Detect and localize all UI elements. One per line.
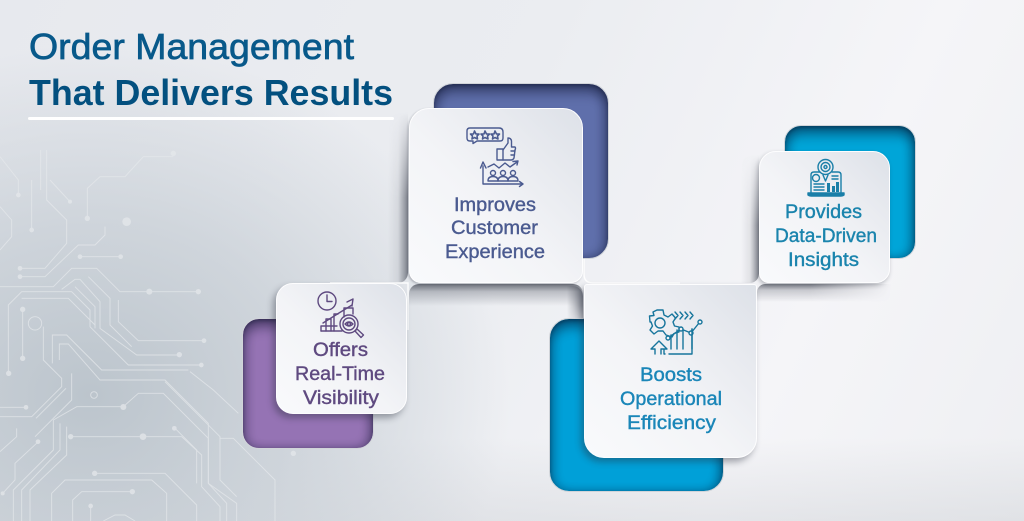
icon: laptop with insight bulb: [775, 158, 877, 271]
label: improves customer experience: Customer: [451, 217, 539, 239]
white card: [276, 283, 407, 414]
panel: provides data-driven insights: [756, 125, 916, 288]
label: offers real-time visibility: [295, 339, 385, 409]
label: provides data-driven insights: Provides: [785, 201, 862, 223]
white card: [409, 108, 583, 283]
label: provides data-driven insights: [775, 201, 877, 271]
icon: clock, growth chart and magnifier: [295, 291, 385, 409]
label: offers real-time visibility: Real-Time: [295, 363, 385, 385]
label: provides data-driven insights: Data-Driven: [775, 225, 877, 247]
blue back square: [549, 318, 724, 492]
label: boosts operational efficiency: Efficiency: [627, 412, 716, 434]
title: Order Management: [29, 26, 354, 67]
white card: [584, 284, 757, 458]
purple back square: [242, 318, 374, 449]
white card: [759, 151, 890, 283]
label: boosts operational efficiency: Boosts: [640, 364, 702, 386]
panel: improves customer experience: [407, 83, 609, 284]
title: [28, 26, 394, 120]
panel: offers real-time visibility: [243, 282, 408, 449]
label: improves customer experience: [445, 194, 545, 263]
cyan back square: [784, 125, 916, 259]
title: That Delivers Results: [29, 72, 393, 113]
label: offers real-time visibility: Offers: [313, 339, 368, 361]
icon: gear, trend and bar chart: [620, 309, 722, 434]
panel: boosts operational efficiency: [549, 284, 758, 492]
icon: star rating, thumbs up and customers: [445, 127, 545, 263]
label: improves customer experience: Improves: [454, 194, 536, 216]
label: provides data-driven insights: Insights: [788, 249, 859, 271]
label: boosts operational efficiency: [620, 364, 722, 434]
label: boosts operational efficiency: Operational: [620, 388, 722, 410]
label: improves customer experience: Experience: [445, 241, 545, 263]
label: offers real-time visibility: Visibility: [303, 387, 379, 409]
indigo back square: [433, 83, 609, 259]
